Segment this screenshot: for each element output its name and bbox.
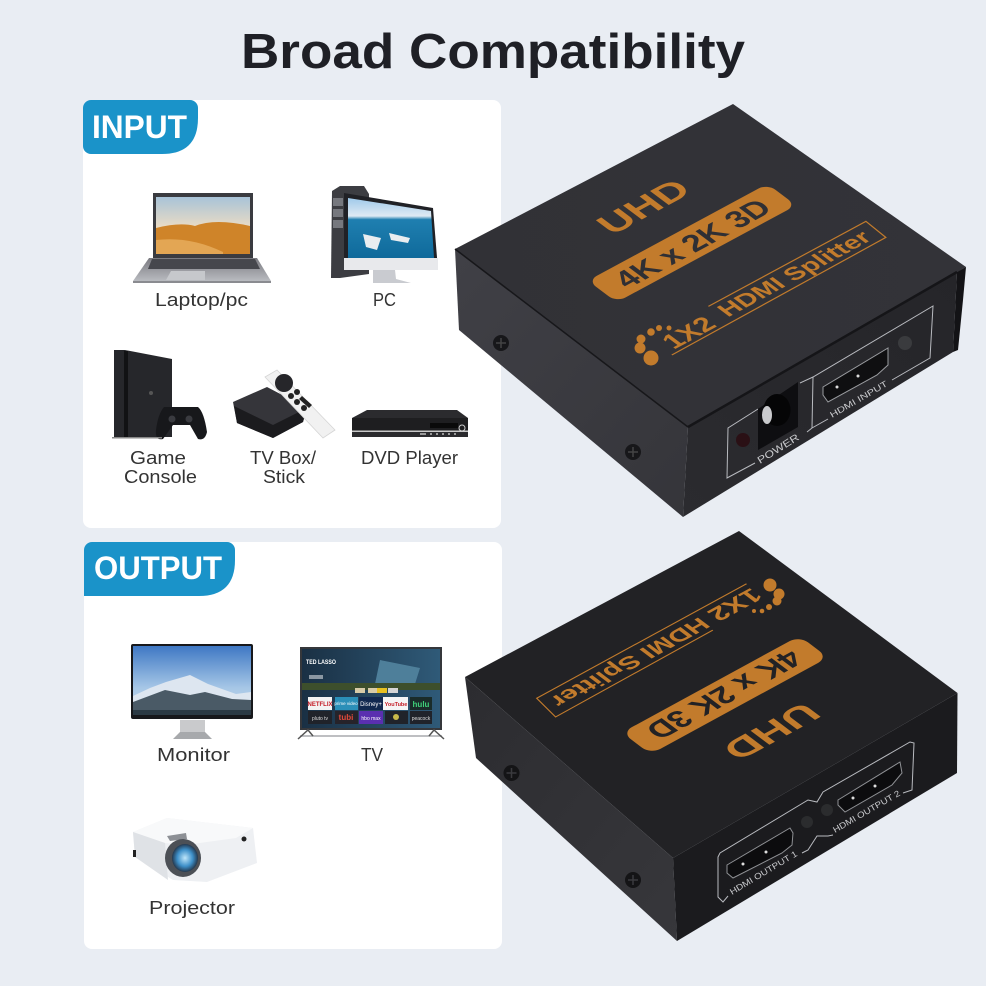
icon: TV: hulu <box>413 700 430 709</box>
label: projector: Projector <box>149 897 235 918</box>
icon: TV: NETFLIX <box>308 702 332 708</box>
lid edge <box>688 272 957 427</box>
4K x 2K 3D pill: 4K x 2K 3D <box>607 195 779 293</box>
power LED <box>736 433 750 447</box>
label: game console <box>124 447 197 487</box>
1X2 HDMI splitter print <box>649 221 890 356</box>
output 2 LED <box>821 804 833 816</box>
device top face <box>455 104 966 427</box>
icon: TV: peacock <box>412 716 431 722</box>
device left side <box>465 677 677 941</box>
HDMI output 2 port <box>838 762 902 812</box>
HDMI INPUT label: HDMI INPUT <box>828 379 889 420</box>
label: DVD player: DVD Player <box>361 447 458 468</box>
label: TV box/stick <box>250 447 317 487</box>
output tag <box>84 542 235 596</box>
label: TV: TV <box>361 744 384 765</box>
HDMI output 1 port <box>727 828 793 878</box>
screw <box>493 335 509 351</box>
front panel outline <box>718 742 914 902</box>
4K x 2K 3D pill <box>622 636 828 754</box>
icon: DVD player <box>352 410 468 437</box>
device front face <box>683 272 957 517</box>
icon: game console <box>112 350 207 439</box>
icon: TV: TED LASSO <box>306 659 336 666</box>
power jack <box>758 382 798 450</box>
label: TV box/stick: TV Box/ <box>250 447 317 468</box>
front panel outline <box>727 306 933 478</box>
input LED <box>898 336 912 350</box>
label: monitor: Monitor <box>157 744 230 765</box>
1X2 HDMI splitter print <box>533 584 769 717</box>
icon: TV: hbo max <box>361 716 381 722</box>
orange dots logo <box>752 578 784 613</box>
1X2 HDMI splitter print: HDMI Splitter <box>711 227 877 321</box>
orange dots logo <box>634 325 672 366</box>
input panel card <box>83 100 501 528</box>
input tag: INPUT <box>92 109 187 145</box>
label: TV box/stick: Stick <box>263 466 306 487</box>
device: HDMI splitter, input side <box>455 104 966 517</box>
HDMI OUTPUT 2 label: HDMI OUTPUT 2 <box>831 788 902 835</box>
screw <box>625 444 641 460</box>
top face print <box>530 132 890 356</box>
icon: TV <box>298 647 444 739</box>
device: HDMI splitter, output side <box>465 531 958 941</box>
4K x 2K 3D pill: 4K x 2K 3D <box>638 644 810 744</box>
icon: laptop <box>133 193 271 283</box>
icon: TV: tubi <box>339 713 353 722</box>
device front face <box>673 693 958 941</box>
4K x 2K 3D pill <box>588 184 796 302</box>
HDMI input port <box>823 348 888 402</box>
output tag: OUTPUT <box>94 550 222 586</box>
output panel card <box>84 542 502 949</box>
icon: TV: Disney+ <box>360 702 382 708</box>
panel: input devices <box>83 100 501 528</box>
icon: TV: prime video <box>334 701 358 706</box>
icon: TV: pluto tv <box>312 716 329 722</box>
panel: output devices <box>84 542 502 949</box>
device left side <box>455 249 688 517</box>
top face print <box>533 584 886 805</box>
title: Broad Compatibility <box>241 25 745 79</box>
HDMI OUTPUT 1 label: HDMI OUTPUT 1 <box>728 848 799 897</box>
icon: TV box and remote <box>233 370 335 438</box>
label: game console: Game <box>130 447 186 468</box>
icon: desktop PC <box>331 186 438 283</box>
1X2 HDMI splitter print: HDMI Splitter <box>544 614 715 711</box>
UHD print: UHD <box>588 174 700 240</box>
POWER label: POWER <box>756 432 801 467</box>
label: game console: Console <box>124 466 197 487</box>
label: laptop/pc: Laptop/pc <box>155 289 248 310</box>
UHD print: UHD <box>714 697 828 766</box>
input tag <box>83 100 198 154</box>
device right lip <box>953 267 966 352</box>
1X2 HDMI splitter print: 1X2 <box>655 312 723 353</box>
label: PC: PC <box>373 289 396 310</box>
icon: TV: YouTube <box>385 702 407 708</box>
icon: monitor <box>131 644 253 739</box>
screw <box>504 765 520 781</box>
screw <box>625 872 641 888</box>
icon: projector <box>133 818 257 882</box>
device top face <box>465 531 958 858</box>
output 1 LED <box>801 816 813 828</box>
1X2 HDMI splitter print: 1X2 <box>701 584 768 625</box>
